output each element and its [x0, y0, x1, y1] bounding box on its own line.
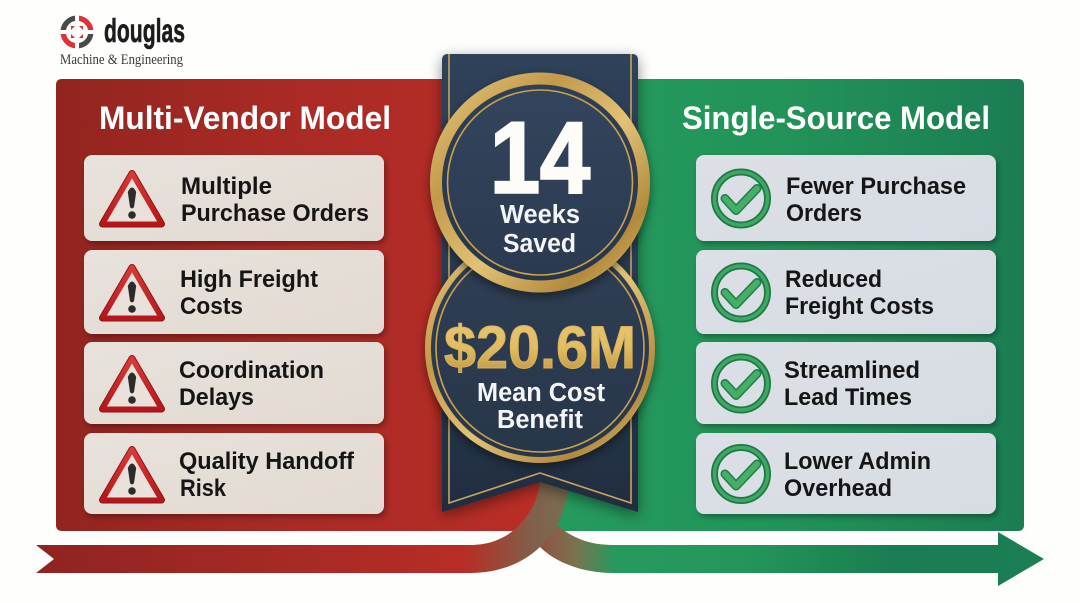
logo wordmark: douglas — [104, 12, 185, 49]
card: quality handoff risk — [84, 433, 384, 514]
label: weeks saved: Saved — [503, 230, 576, 258]
ribbon — [442, 54, 638, 512]
card: reduced freight costs — [696, 250, 996, 334]
card: lower admin overhead — [696, 433, 996, 514]
card: multiple purchase orders — [84, 155, 384, 241]
label: mean cost benefit: Benefit — [497, 406, 583, 434]
value: 14: 14 — [490, 102, 590, 214]
card: quality handoff risk: Risk — [180, 475, 226, 502]
card: high freight costs — [84, 250, 384, 334]
card: coordination delays — [84, 342, 384, 424]
card: high freight costs: Costs — [180, 293, 243, 320]
label: weeks saved: Weeks — [500, 201, 580, 229]
label: mean cost benefit: Mean Cost — [477, 379, 605, 407]
arrow: green outcome — [540, 525, 1044, 586]
logo mark — [61, 16, 93, 48]
value: $20.6M: $20.6M — [444, 314, 636, 381]
card: streamlined lead times: Streamlined — [784, 357, 920, 384]
heading: single-source: Single-Source Model — [682, 100, 990, 136]
badge: mean cost benefit — [425, 233, 655, 463]
card: lower admin overhead: Overhead — [784, 475, 892, 502]
card: lower admin overhead: Lower Admin — [784, 448, 931, 475]
logo — [60, 12, 185, 68]
label: mean cost benefit — [477, 379, 605, 434]
card: fewer purchase orders: Orders — [786, 200, 862, 227]
card: multiple purchase orders: Purchase Orders — [181, 200, 369, 227]
card: coordination delays: Delays — [179, 384, 254, 411]
heading: multi-vendor: Multi-Vendor Model — [99, 100, 391, 136]
card: reduced freight costs: Reduced — [785, 266, 882, 293]
logo tagline: Machine & Engineering — [60, 52, 183, 68]
card: reduced freight costs: Freight Costs — [785, 293, 934, 320]
arrow: red tail — [36, 478, 570, 573]
card: coordination delays: Coordination — [179, 357, 324, 384]
label: weeks saved — [500, 201, 580, 258]
panel: single-source model — [540, 79, 1024, 531]
badge: weeks saved — [430, 72, 650, 292]
card: streamlined lead times: Lead Times — [784, 384, 912, 411]
card: fewer purchase orders: Fewer Purchase — [786, 173, 966, 200]
panel: multi-vendor model — [56, 79, 540, 531]
card: streamlined lead times — [696, 342, 996, 424]
card: fewer purchase orders — [696, 155, 996, 241]
card: high freight costs: High Freight — [180, 266, 318, 293]
card: multiple purchase orders: Multiple — [181, 173, 272, 200]
card: quality handoff risk: Quality Handoff — [179, 448, 355, 475]
